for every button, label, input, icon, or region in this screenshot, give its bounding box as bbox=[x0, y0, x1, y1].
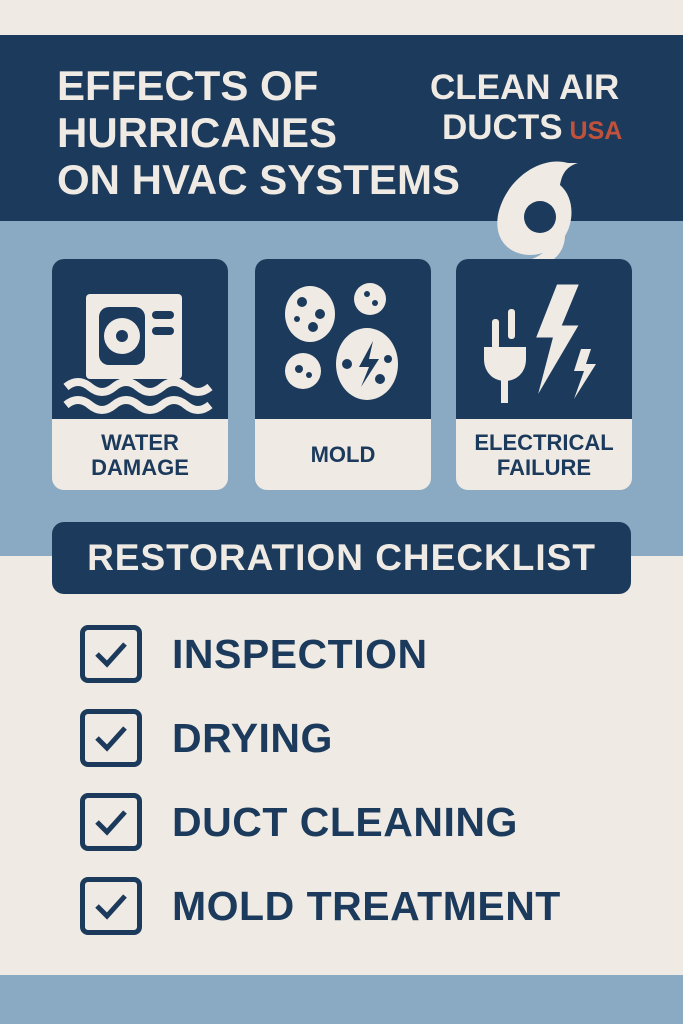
checklist item: inspection: INSPECTION bbox=[172, 631, 428, 677]
checklist heading bbox=[52, 522, 631, 594]
title: HURRICANES bbox=[57, 109, 337, 156]
checklist item: duct cleaning: DUCT CLEANING bbox=[172, 799, 518, 845]
icon: hurricane bbox=[497, 162, 578, 259]
panel: electrical failure: ELECTRICAL bbox=[474, 430, 614, 454]
checklist item: inspection bbox=[80, 625, 428, 683]
checklist item: mold treatment: MOLD TREATMENT bbox=[172, 883, 561, 929]
panel: water damage bbox=[52, 259, 228, 490]
logo text: DUCTS USA bbox=[442, 108, 622, 147]
panel: electrical failure bbox=[456, 259, 632, 490]
panel: mold: MOLD bbox=[311, 442, 375, 467]
bottom band bbox=[0, 975, 683, 1024]
title bbox=[57, 62, 460, 203]
title: EFFECTS OF bbox=[57, 62, 318, 109]
checklist heading: RESTORATION CHECKLIST bbox=[87, 537, 596, 578]
checklist item: mold treatment bbox=[80, 877, 561, 935]
title: ON HVAC SYSTEMS bbox=[57, 156, 460, 203]
panel: water damage: WATER bbox=[101, 430, 179, 454]
logo text: CLEAN AIR bbox=[430, 68, 619, 107]
icon: plug and lightning bbox=[484, 284, 596, 403]
checklist item: duct cleaning bbox=[80, 793, 518, 851]
icon: AC unit with water bbox=[64, 294, 212, 414]
checklist item: drying: DRYING bbox=[172, 715, 333, 761]
checklist item: drying bbox=[80, 709, 333, 767]
header band bbox=[0, 35, 683, 221]
panel: electrical failure: FAILURE bbox=[497, 454, 591, 480]
panel: water damage: DAMAGE bbox=[91, 454, 189, 480]
panel: mold bbox=[255, 259, 431, 490]
logo text bbox=[430, 68, 622, 147]
light blue band bbox=[0, 221, 683, 556]
icon: mold spores bbox=[285, 283, 398, 400]
